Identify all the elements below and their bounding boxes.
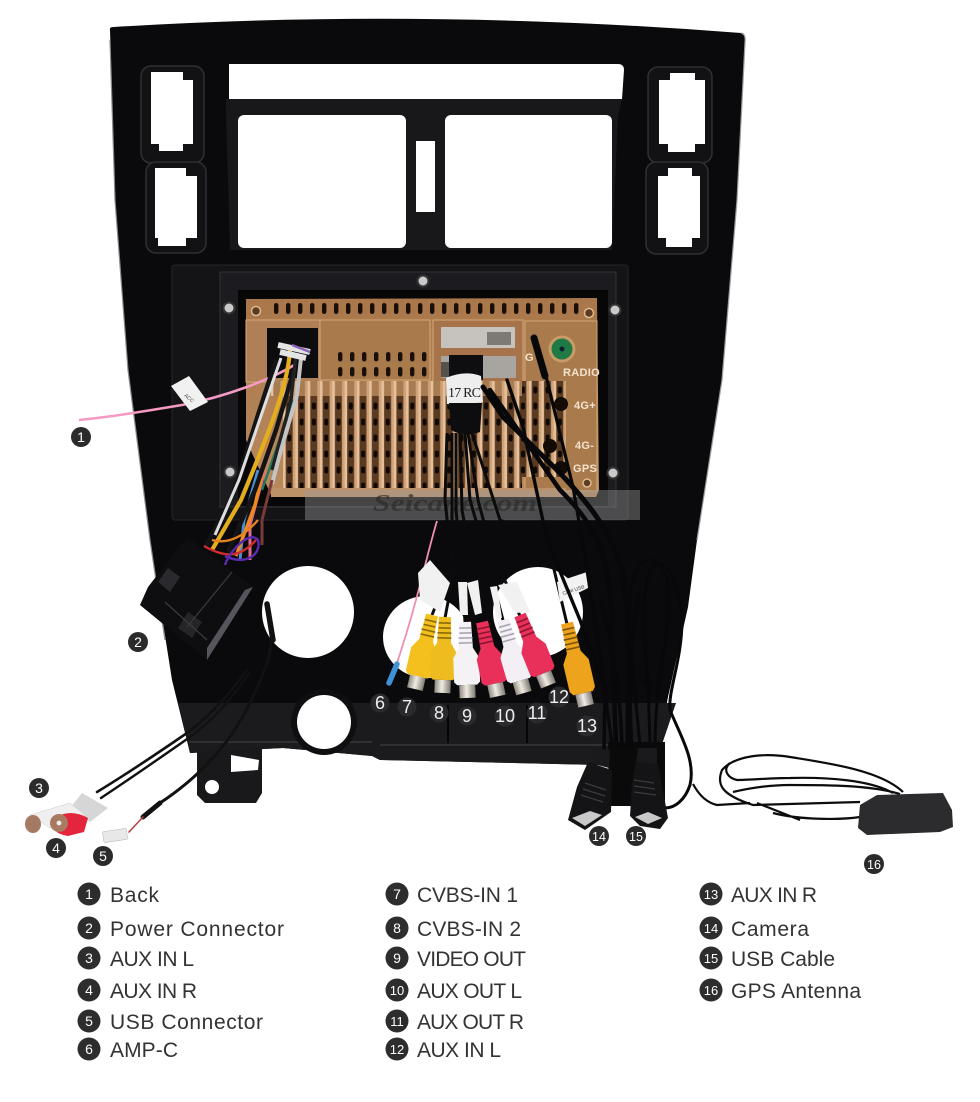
legend item 10: AUX OUT L [417, 980, 522, 1003]
connector block [433, 320, 523, 382]
callout 2 [128, 632, 148, 652]
port labels: RADIO [563, 367, 600, 379]
RCA connector: AUX OUT L red [469, 619, 511, 699]
white socket bottom [441, 356, 516, 378]
GPS antenna [693, 755, 953, 835]
legend column 3 [700, 882, 861, 1003]
panel: copper chassis [246, 298, 600, 497]
legend item 13 [700, 882, 817, 907]
legend item 12: 12 [390, 1042, 404, 1057]
legend item 5: USB Connector [110, 1011, 263, 1034]
port labels: 4G+ [574, 400, 596, 412]
fin base [271, 488, 566, 497]
panel: black dash frame [110, 19, 745, 765]
white socket top [441, 327, 515, 348]
RCA connector: CVBS-IN 1 yellow [402, 612, 445, 692]
legend item 6: 6 [85, 1041, 93, 1057]
RCA connector: CVBS-IN 2 yellow [429, 617, 458, 693]
legend item 2: 2 [85, 920, 93, 936]
legend item 13: 13 [704, 887, 718, 902]
callout 8 [430, 703, 448, 723]
heat sink fin tops [271, 381, 522, 396]
bracket screws [224, 276, 620, 478]
port: radio [548, 336, 576, 362]
cable backing behind USB connectors [608, 742, 665, 806]
camera tag [557, 572, 588, 602]
RCA pair: AUX IN L and R [25, 793, 108, 836]
callout 8: 8 [434, 703, 444, 723]
legend item 13: AUX IN R [731, 884, 817, 907]
callout 11: 11 [528, 703, 546, 723]
antenna block [525, 321, 597, 491]
USB female connector: USB cable [630, 748, 668, 829]
wire bundle [204, 345, 310, 565]
port labels: 4G- [575, 440, 594, 452]
legend item 9: VIDEO OUT [417, 948, 526, 971]
callout 13: 13 [577, 716, 597, 736]
legend item 15: USB Cable [731, 948, 835, 971]
callout 15 [626, 826, 646, 846]
legend item 14: Camera [731, 918, 809, 941]
RCA connector: VIDEO OUT white [452, 622, 481, 698]
legend item 10: 10 [390, 983, 404, 998]
callout numbers on photo [29, 427, 884, 874]
opening: centre left hole [383, 596, 469, 678]
cable: pink back wire [79, 364, 437, 663]
legend item 14: 14 [704, 921, 718, 936]
black cables right bundle [483, 338, 691, 808]
legend item 3: 3 [85, 950, 93, 966]
callout 6: 6 [375, 693, 385, 713]
callout 1: 1 [77, 429, 85, 445]
port labels: G [525, 352, 534, 364]
legend item 16: GPS Antenna [731, 980, 861, 1003]
legend item 6 [78, 1038, 178, 1062]
port holes [543, 397, 568, 475]
heat sink fins [283, 396, 522, 488]
panel: head unit mounting bracket [172, 265, 628, 520]
RCA connector: AUX IN R orange [554, 620, 599, 709]
legend item 9: 9 [393, 950, 401, 966]
RCA connector: AUX OUT R white [491, 616, 536, 697]
callout 1 [71, 427, 91, 447]
callout 5 [93, 846, 113, 866]
tag on pink wire: ACC [183, 393, 195, 405]
power connector [140, 537, 253, 660]
callout 12: 12 [549, 687, 569, 707]
cable: loom sleeve [446, 355, 483, 435]
callout 5: 5 [99, 848, 107, 864]
legend item 2: Power Connector [110, 918, 284, 941]
opening: large left round hole [262, 566, 354, 658]
RCA connector: AUX IN L red [508, 610, 561, 690]
callout 16: 16 [867, 858, 881, 872]
callout 4: 4 [52, 840, 60, 856]
cable: AUX and USB tails [97, 604, 273, 832]
callout 9 [458, 706, 476, 726]
legend item 7: CVBS-IN 1 [417, 884, 518, 907]
tab hole [205, 780, 219, 794]
USB small white plug [102, 828, 128, 843]
legend item 12 [386, 1038, 501, 1062]
callout 14: 14 [592, 830, 606, 844]
opening: right window [445, 115, 612, 248]
watermark band: Seicane.com [373, 491, 537, 517]
port labels [525, 352, 600, 475]
power socket [267, 328, 318, 378]
vent strip [270, 303, 580, 317]
legend item 1 [78, 882, 160, 907]
callout 3: 3 [35, 780, 43, 796]
callout 7 [398, 697, 416, 717]
opening: left window [238, 115, 406, 248]
legend item 15: 15 [704, 951, 718, 966]
RCA tags [418, 560, 530, 618]
legend item 3 [78, 946, 194, 971]
legend item 4: AUX IN R [110, 980, 197, 1003]
tag on pink wire [171, 376, 208, 411]
blue tip [389, 664, 397, 683]
callout 3 [29, 778, 49, 798]
legend item 1: Back [110, 884, 160, 907]
callout 10: 10 [495, 706, 515, 726]
legend item 3: AUX IN L [110, 948, 194, 971]
legend item 5: 5 [85, 1013, 93, 1029]
opening: side clip top left [151, 72, 193, 151]
opening: lower round hole [291, 689, 357, 755]
opening: top slot [229, 64, 624, 99]
GPS puck [858, 793, 953, 835]
watermark band [305, 490, 640, 520]
camera tag: CAM USB [562, 584, 586, 597]
mounting tab [197, 745, 262, 803]
opening: side clip bottom left [155, 168, 197, 246]
USB female connector: camera [568, 748, 612, 830]
legend item 4 [78, 978, 197, 1003]
legend item 7: 7 [393, 886, 401, 902]
callout 2: 2 [134, 634, 142, 650]
legend item 11: AUX OUT R [417, 1011, 524, 1034]
callout 4 [46, 838, 66, 858]
cable: loom sleeve: 17 RC [448, 386, 481, 401]
lower trim strip [178, 703, 676, 765]
legend item 8: 8 [393, 920, 401, 936]
side clip housings [141, 66, 712, 254]
legend item 11: 11 [390, 1014, 404, 1029]
legend item 6: AMP-C [110, 1039, 178, 1062]
screws [252, 306, 594, 487]
legend item 14 [700, 916, 809, 941]
callout 7: 7 [402, 697, 412, 717]
opening: side clip top right [659, 73, 705, 152]
opening: side clip bottom right [658, 168, 700, 247]
callout 16 [864, 854, 884, 874]
callout 9: 9 [462, 706, 472, 726]
GPS cable coils [693, 755, 903, 820]
legend item 8: CVBS-IN 2 [417, 918, 521, 941]
legend column 2 [386, 882, 526, 1062]
legend item 16: 16 [704, 983, 718, 998]
RCA cables fan [432, 433, 567, 624]
callout 15: 15 [629, 830, 643, 844]
opening: centre right hole [493, 567, 583, 657]
opening: centre slot [416, 141, 435, 212]
frame cross bars [226, 99, 622, 250]
plain copper left block [246, 320, 320, 382]
middle vent block [320, 320, 430, 380]
legend item 1: 1 [85, 886, 93, 902]
callout 14 [589, 826, 609, 846]
port labels: GPS [573, 463, 597, 475]
callout 6 [370, 693, 390, 713]
legend column 1 [78, 882, 284, 1062]
legend item 4: 4 [85, 982, 93, 998]
legend item 12: AUX IN L [417, 1039, 501, 1062]
